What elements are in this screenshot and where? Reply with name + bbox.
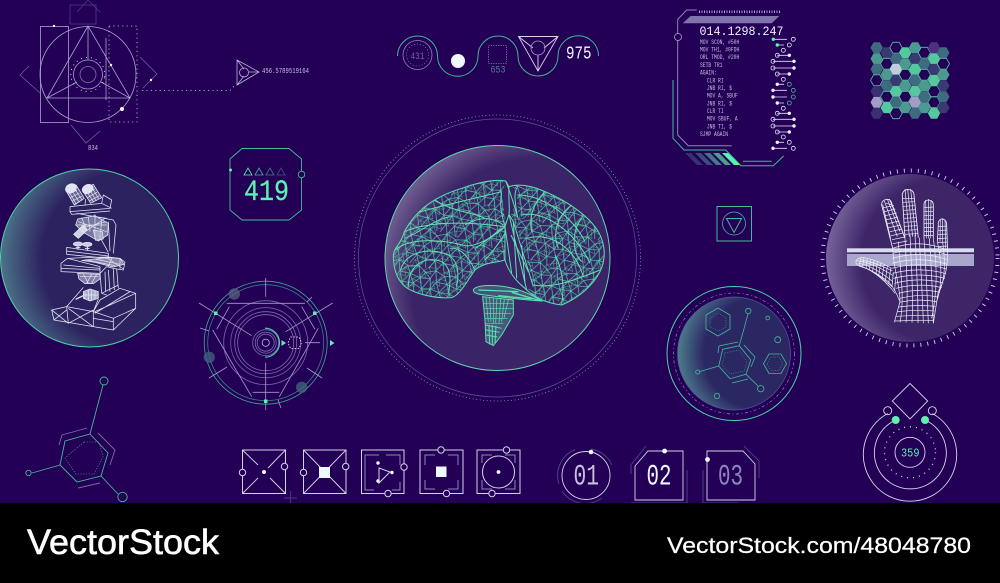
panel: hand scan sphere xyxy=(822,170,998,346)
numbered step: 01: 01 xyxy=(574,460,599,494)
icon: triangle in square xyxy=(717,206,752,241)
icon: square target xyxy=(420,447,463,497)
assembly code text: JNB RI, $ xyxy=(707,100,733,108)
triangle marker with coordinate: 456.5789519164 xyxy=(262,68,309,76)
assembly code text: MOV SBUF, A xyxy=(707,115,738,123)
brand name: VectorStock xyxy=(27,523,220,562)
panel: brain sphere xyxy=(354,115,640,401)
code readout panel xyxy=(673,10,796,166)
molecule diagram xyxy=(696,308,786,399)
triangle marker with coordinate xyxy=(237,60,309,85)
counter panel: 419 xyxy=(229,148,305,220)
panel: petri dish with molecule xyxy=(667,286,801,420)
assembly code text: MOV SCON, #50H xyxy=(700,38,739,46)
molecule: bottom left xyxy=(26,377,127,502)
assembly code text: AGAIN: xyxy=(700,69,717,77)
numbered step: 03 xyxy=(703,446,759,503)
radial gauge: 359 xyxy=(863,384,957,501)
numbered step: 01 xyxy=(558,449,612,504)
icon: square with x and filled centre xyxy=(300,450,349,494)
wave strip with readouts: 975 xyxy=(566,44,592,64)
counter panel: 419: 419 xyxy=(244,176,289,210)
icon: triangle nodes xyxy=(362,450,407,497)
radial gauge: 359: 359 xyxy=(901,447,920,461)
cerebellum and stem xyxy=(473,285,542,346)
assembly code text: JNB TI, $ xyxy=(707,123,733,131)
numbered step: 02 xyxy=(631,446,687,503)
assembly code text xyxy=(700,38,739,138)
wave strip with readouts: 653 xyxy=(490,66,506,76)
code readout panel: 014.1298.247 xyxy=(700,24,784,39)
targeting dial xyxy=(199,278,334,410)
assembly code text: CLR TI xyxy=(707,107,724,115)
image reference: VectorStock.com/48048780 xyxy=(667,533,971,558)
geometric diagram: circle and triangle xyxy=(20,0,236,143)
wave strip with readouts xyxy=(398,36,598,76)
assembly code text: ORL TMOD, #20H xyxy=(700,53,739,61)
bottom icon row xyxy=(239,447,520,503)
panel: microscope sphere xyxy=(0,169,178,347)
wave strip with readouts: 431 xyxy=(410,52,424,63)
assembly code text: MOV A, SBUF xyxy=(707,92,738,100)
assembly code text: MOV TH1, #0FDH xyxy=(700,46,739,54)
icon: square with x and dot xyxy=(239,450,288,494)
numbered step: 02: 02 xyxy=(646,460,672,494)
icon: circle target xyxy=(477,447,520,497)
icon: microscope wireframe xyxy=(52,182,136,330)
assembly code text: SJMP AGAIN xyxy=(700,130,728,138)
assembly code text: CLR RI xyxy=(707,77,724,85)
assembly code text: SETB TR1 xyxy=(700,61,723,69)
numbered step: 03: 03 xyxy=(718,460,743,494)
label: 834: 834 xyxy=(88,145,98,153)
hexagon grid xyxy=(870,42,950,119)
scan bars xyxy=(847,248,974,266)
footer bar xyxy=(0,503,1000,583)
DNA strand icon xyxy=(771,37,796,150)
brain wireframe xyxy=(390,177,610,346)
hand wireframe xyxy=(856,189,948,323)
assembly code text: JNB RI, $ xyxy=(707,84,733,92)
